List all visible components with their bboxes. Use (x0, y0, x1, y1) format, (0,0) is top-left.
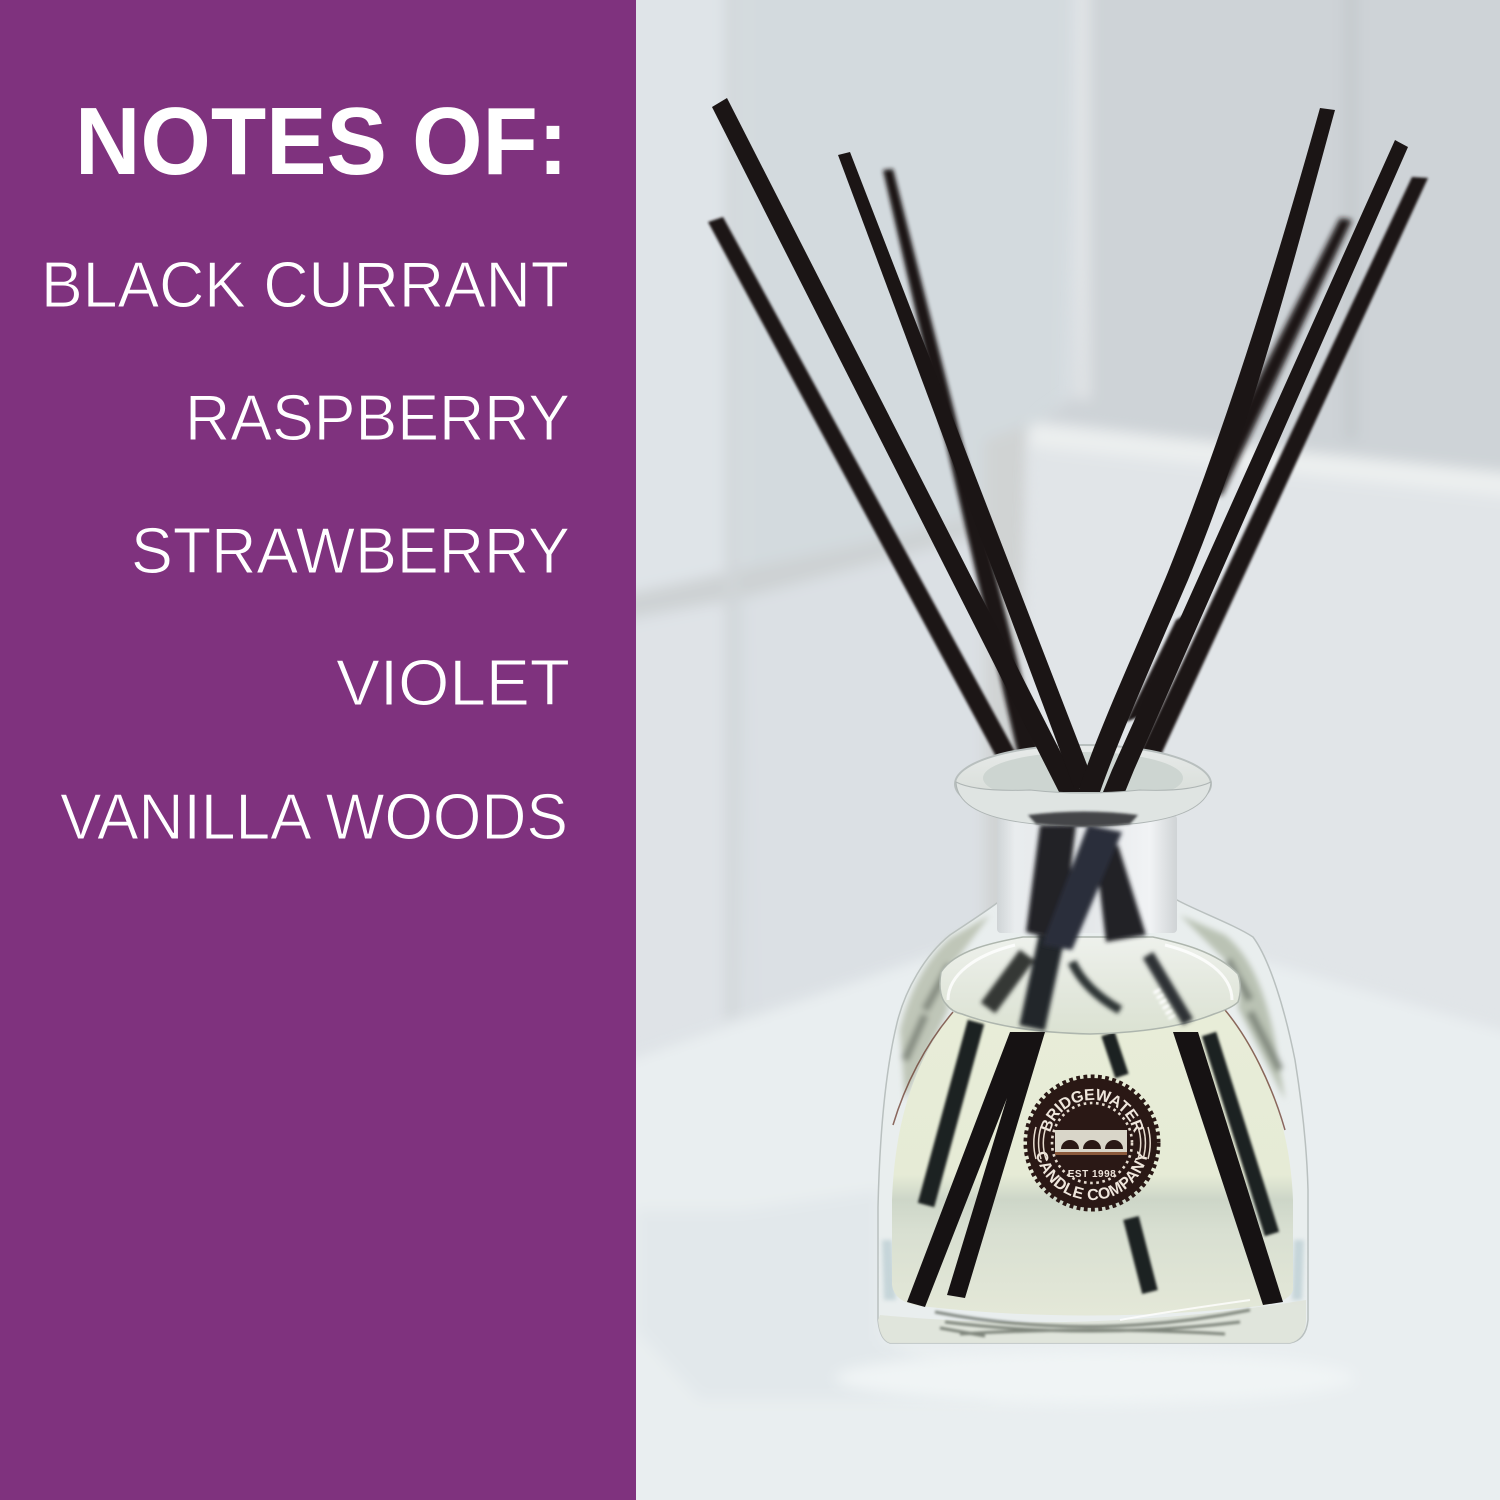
heading: notes of: NOTES OF: (75, 88, 568, 195)
blurred background reeds (708, 169, 1428, 792)
neck (997, 815, 1177, 933)
reeds above rim (712, 98, 1408, 792)
badge lettering: EST 1998 (1068, 1169, 1116, 1180)
badge lettering: CANDLE COMPANY (1036, 1150, 1148, 1200)
rim front edge (956, 782, 1211, 826)
refracted reeds in liquid (926, 1022, 1272, 1292)
back shoulder shading (900, 915, 1285, 1100)
glass body (878, 900, 1308, 1343)
reeds through shoulder (988, 935, 1188, 1028)
corner glass tint (882, 1240, 1304, 1300)
note: violet: VIOLET (336, 647, 570, 719)
note: vanilla woods: VANILLA WOODS (60, 781, 568, 853)
badge lettering: BRIDGEWATER (1040, 1088, 1144, 1133)
shoulder glass (940, 937, 1240, 1034)
text block: fragrance notes (41, 249, 570, 853)
rim (955, 745, 1211, 823)
diffuser bottle (712, 98, 1408, 1344)
liquid (892, 1010, 1293, 1316)
bridge (1055, 1130, 1127, 1155)
rim reed reflection (1028, 812, 1138, 827)
right wall tiles (1020, 0, 1500, 1030)
badge side arcs (1034, 1127, 1150, 1159)
shoulder highlight (948, 945, 1232, 1000)
counter top (620, 945, 1500, 1500)
reeds inside neck (1026, 825, 1146, 950)
panel: purple background (0, 0, 636, 1500)
shoulder sparkle (1156, 990, 1172, 1018)
glass base (878, 1300, 1306, 1343)
panel: bathroom photo background (620, 0, 1500, 1500)
sharp reeds in liquid (907, 1032, 1283, 1307)
left wall tiles (620, 0, 1085, 1066)
note: strawberry: STRAWBERRY (131, 515, 570, 587)
note: raspberry: RASPBERRY (185, 382, 570, 454)
logo badge (1024, 1074, 1160, 1212)
liquid edge line (893, 1010, 1285, 1130)
badge lettering (1036, 1088, 1148, 1200)
note: black currant: BLACK CURRANT (41, 249, 569, 321)
